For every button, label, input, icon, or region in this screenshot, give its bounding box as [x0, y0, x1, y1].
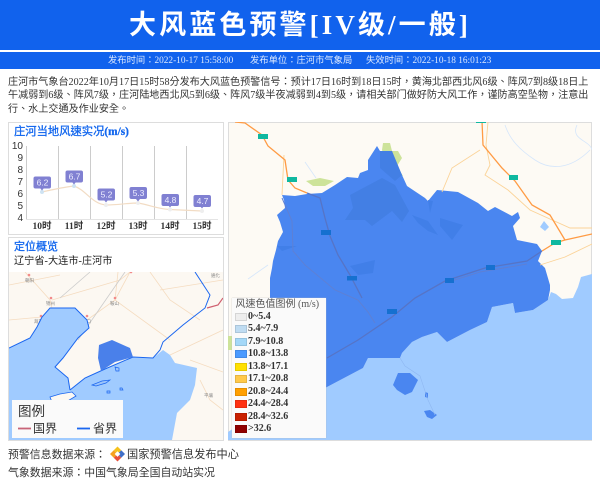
- x axis labels: 14时: [160, 220, 180, 232]
- legend rows: 28.4~32.6: [248, 410, 288, 422]
- callout values: 5.3: [133, 188, 145, 198]
- city labels: [25, 272, 220, 399]
- legend rows: 10.8~13.8: [248, 348, 288, 359]
- location path: 辽宁省-大连市-庄河市: [14, 256, 112, 267]
- legend rows: 20.8~24.4: [248, 386, 288, 396]
- highway outside region: [235, 121, 592, 251]
- location heading: 定位概览: [14, 241, 58, 253]
- legend rows: 24.4~28.4: [248, 398, 288, 409]
- wind speed line chart: [12, 141, 218, 232]
- city labels: 锦州: [46, 300, 55, 307]
- city dots: [28, 271, 132, 317]
- map legend: [12, 400, 123, 438]
- location map: [9, 272, 223, 440]
- issue info bar: [0, 52, 600, 68]
- x axis labels: 13时: [128, 220, 148, 232]
- issue info bar: 失效时间：2022-10-18 16:01:23: [366, 56, 491, 66]
- Zhuanghe district: [98, 340, 133, 371]
- legend rows: 5.4~7.9: [248, 323, 278, 334]
- bridge line: [400, 358, 435, 415]
- y axis labels: 8: [17, 165, 23, 176]
- legend rows: 0~5.4: [248, 310, 271, 322]
- green areas: [228, 143, 403, 350]
- mountain area: [345, 151, 409, 226]
- city labels: 朝阳: [25, 277, 34, 284]
- panel: location overview: [8, 237, 224, 441]
- city labels: 葫芦岛: [34, 318, 48, 325]
- main warning area map: [228, 122, 592, 441]
- road shields: [258, 119, 561, 314]
- map legend: 省界: [93, 420, 117, 436]
- callout values: 4.7: [197, 196, 209, 206]
- wind speed line: [42, 186, 202, 211]
- y axis labels: 4: [17, 213, 23, 224]
- city labels: 通化: [211, 272, 220, 279]
- y axis labels: [12, 141, 23, 224]
- warning text block: 庄河市气象台2022年10月17日15时58分发布大风蓝色预警信号：预计17日16时到18日15时，黄海北部西北风6级、阵风7到8级18日上: [8, 76, 588, 88]
- x axis labels: 10时: [32, 220, 52, 232]
- warning text block: 行、水上交通及作业安全。: [8, 104, 129, 115]
- warning data source: 国家预警信息发布中心: [127, 449, 239, 461]
- map legend: 图例: [18, 400, 45, 420]
- callout values: 6.2: [37, 178, 49, 188]
- roads inside region: [307, 193, 542, 358]
- y axis labels: 9: [17, 153, 23, 164]
- islands: [393, 373, 418, 395]
- y axis labels: 7: [17, 177, 23, 188]
- panel: local wind speed chart: [8, 122, 224, 235]
- offshore islands: [92, 367, 123, 393]
- value callouts: [34, 170, 211, 208]
- weather data source: 气象数据来源：中国气象局全国自动站实况: [8, 467, 215, 479]
- data points: [40, 184, 76, 194]
- sea: [9, 308, 197, 440]
- icon: warning centre logo: [110, 446, 125, 462]
- chart heading: 庄河当地风速实况(m/s): [14, 126, 129, 138]
- wind speed colour legend: [232, 298, 326, 438]
- reservoirs: [277, 200, 463, 275]
- warning data source: [8, 448, 239, 461]
- Dalian tip: [50, 392, 76, 402]
- legend title: 风速色值图例 (m/s): [236, 299, 319, 310]
- title banner: [0, 0, 600, 50]
- small lake: [540, 221, 549, 231]
- title banner: 大风蓝色预警[IV级/一般]: [129, 10, 471, 40]
- minor roads outside region: [282, 122, 592, 265]
- legend rows: >32.6: [248, 423, 271, 434]
- callout values: 4.8: [165, 195, 177, 205]
- issue info bar: 发布单位：庄河市气象局: [250, 56, 352, 66]
- national border: [207, 298, 223, 308]
- city labels: 平壤: [204, 392, 213, 399]
- warning data source: 预警信息数据来源：: [8, 449, 106, 461]
- wind warning region: [270, 146, 550, 405]
- x axis labels: 12时: [96, 220, 116, 232]
- legend rows: 17.1~20.8: [248, 373, 288, 384]
- warning text block: 午减弱到6级、阵风7级，庄河陆地西北风5到6级、阵风7级半夜减弱到4到5级，请相关部门做好防大风工作，谨防高空坠物，注意出: [8, 90, 588, 101]
- x axis labels: [32, 220, 212, 232]
- coastline and provincial border: [9, 272, 210, 390]
- callout values: 6.7: [69, 172, 81, 182]
- x axis labels: 15时: [192, 220, 212, 232]
- rivers outside region: [248, 125, 592, 279]
- y axis labels: 5: [17, 201, 23, 212]
- x axis labels: 11时: [65, 220, 84, 232]
- y axis labels: 6: [17, 189, 23, 200]
- sea: [228, 274, 592, 440]
- city labels: 鞍山: [110, 300, 119, 307]
- warning text block: [8, 76, 588, 115]
- legend rows: 7.9~10.8: [248, 336, 283, 346]
- legend rows: [235, 310, 288, 434]
- y axis labels: 10: [12, 141, 23, 152]
- callout values: 5.2: [101, 190, 113, 200]
- callout values: [37, 172, 209, 206]
- legend rows: 13.8~17.1: [248, 360, 288, 372]
- map legend: 国界: [33, 420, 57, 436]
- city labels: 营口: [82, 318, 91, 325]
- issue info bar: 发布时间：2022-10-17 15:58:00: [108, 56, 233, 66]
